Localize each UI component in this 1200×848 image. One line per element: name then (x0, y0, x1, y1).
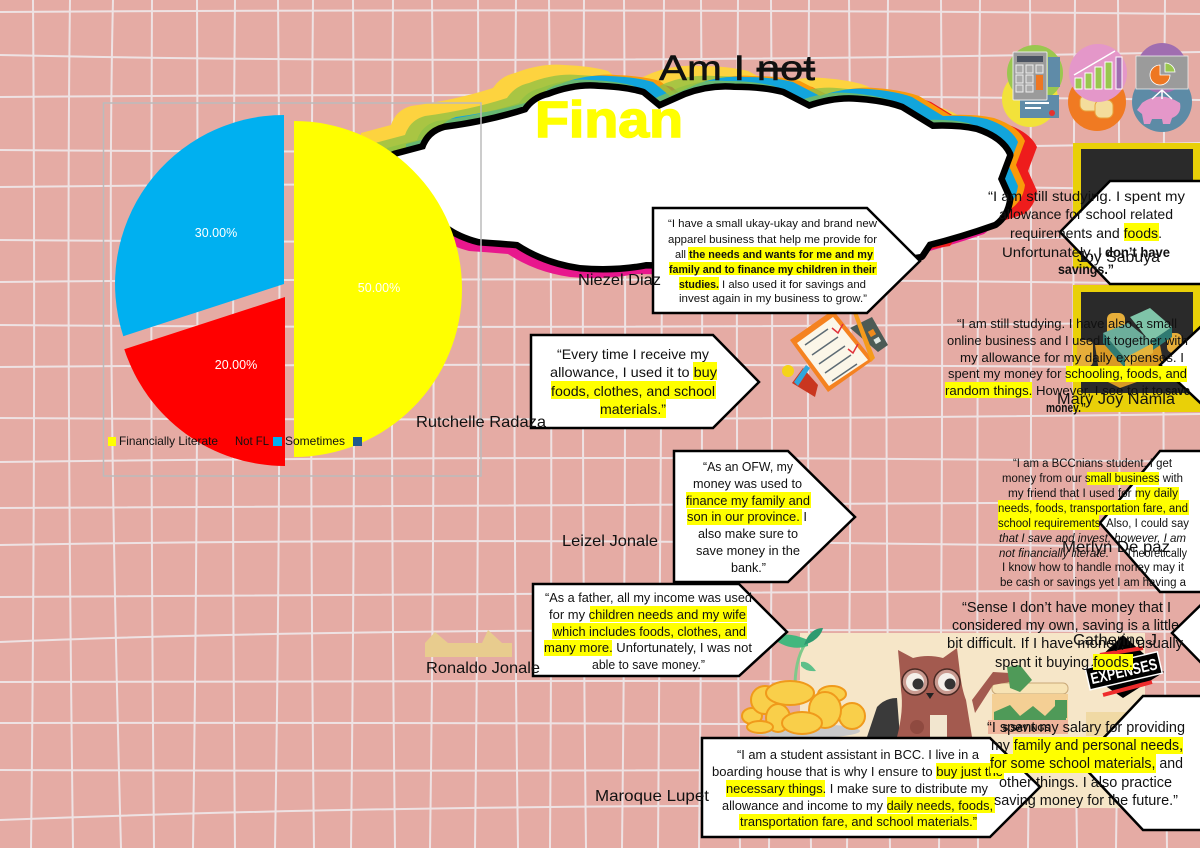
quote: Ronaldo Jonale: which includes foods, clothes, and (552, 625, 746, 639)
quote text: Mary Joy Namla: “I am still studying. I have also a small (957, 317, 1177, 331)
icon: money stack (1077, 308, 1182, 388)
quote text: Joy Sabuya: savings.” (1058, 261, 1114, 277)
quote: Maroque Lupet: necessary things. I make sure to distribute my (726, 782, 989, 796)
quote: Niezel Diaz: all (675, 249, 686, 261)
quote text: salary: for some school materials, and (990, 755, 1183, 772)
quote: Maroque Lupet: allowance and income to my daily needs, foods, (722, 799, 993, 813)
quote text: Mary Joy Namla: money.” (1046, 401, 1086, 415)
title: Am I not (659, 49, 815, 88)
quote: Rutchelle Radaza: “Every time I receive my (557, 346, 709, 362)
name: Leizel Jonale: Leizel Jonale (562, 533, 658, 550)
icon: EXPENSES stamp: EXPENSES (1089, 656, 1159, 688)
quote text: Merlyn De paz: Theoretically (1126, 548, 1187, 560)
quote text: Joy Sabuya: “I am still studying. I spent my (988, 188, 1185, 204)
quote text: Joy Sabuya (988, 188, 1185, 277)
quote: Ronaldo Jonale (533, 584, 787, 676)
name: Maroque Lupet: Maroque Lupet (595, 788, 710, 805)
legend: Financially Literate (119, 434, 218, 448)
quote: Leizel Jonale: bank.” (731, 560, 766, 575)
icon: savings jar (988, 683, 1068, 734)
chalkboard 2 (1073, 285, 1200, 412)
pie chart (104, 103, 481, 476)
quote text: salary (987, 719, 1185, 809)
callout box (533, 584, 787, 676)
icon: top right finance icons (1002, 43, 1192, 132)
quote: Niezel Diaz: the needs and wants for me and my (689, 249, 874, 261)
quote text: Joy Sabuya: requirements and foods. (1010, 225, 1162, 241)
callout: Joy Sabuya box (1060, 181, 1200, 284)
quote text: salary: other things. I also practice (999, 774, 1172, 791)
icon: squirrel (867, 648, 1032, 737)
quote text: Mary Joy Namla: online business and I used it together with (947, 334, 1188, 348)
quote text: Mary Joy Namla: my allowance for my daily expenses. I (960, 351, 1184, 365)
slice: 50% financially literate (294, 121, 462, 457)
quote text: Merlyn De paz: my friend that I used for my daily (1008, 488, 1178, 500)
callout box (674, 451, 855, 582)
legend: Sometimes (285, 434, 345, 448)
quote: Maroque Lupet (702, 738, 1040, 837)
quote: Niezel Diaz: invest again in my business to grow.” (679, 293, 867, 305)
icon: second jar (1086, 712, 1130, 736)
quote: Leizel Jonale: also make sure to (698, 526, 798, 541)
title: Finan: Finan (535, 91, 683, 148)
chart frame (104, 103, 481, 476)
quote: Ronaldo Jonale: “As a father, all my income was used (545, 591, 752, 605)
chalkboards (1073, 143, 1200, 412)
callout: Catherine box (1172, 596, 1200, 672)
quote text: Catherine J: spent it buying foods. (995, 655, 1133, 671)
quote: Niezel Diaz: apparel business that help me provide for (668, 234, 877, 246)
quote: Ronaldo Jonale: for my children needs and my wife (549, 608, 746, 622)
quote: Leizel Jonale: finance my family and (686, 493, 810, 508)
icon: monthly expenses planner (782, 310, 888, 397)
quote text: Merlyn De paz: be cash or savings yet I am having a (1000, 577, 1187, 589)
quote: Rutchelle Radaza (531, 335, 759, 428)
quote text: Catherine J: “Sense I don’t have money that I (962, 600, 1171, 616)
quote text: Catherine J: bit difficult. If I have money, I usually (947, 636, 1184, 652)
quote: Leizel Jonale: son in our province. I (687, 509, 807, 524)
quote: Leizel Jonale (674, 451, 855, 582)
quote text: Mary Joy Namla: spent my money for schooling, foods, and (948, 367, 1187, 381)
quote text: Mary Joy Namla: save (1165, 384, 1190, 398)
quote: Niezel Diaz (653, 208, 920, 313)
slice: 20% not FL (124, 297, 285, 466)
name: Merlyn De paz: Merlyn De paz (1062, 539, 1170, 556)
quote: Rutchelle Radaza: foods, clothes, and school (551, 383, 715, 399)
quote: Niezel Diaz: “I have a small ukay-ukay and brand new (668, 218, 877, 230)
quote text: salary: saving money for the future.” (994, 792, 1178, 809)
rainbow cloud banner (361, 65, 1037, 278)
callout box (653, 208, 920, 313)
quote text: Merlyn De paz: that I save and invest, however, I am (999, 533, 1186, 545)
quote: Rutchelle Radaza: allowance, I used it to buy (550, 364, 717, 380)
quote text: Catherine J: considered my own, saving is a little (952, 618, 1179, 634)
icon: coin pile and sprout (742, 628, 865, 738)
icon: faint building (425, 630, 512, 657)
name: Catherine J: Catherine J (1073, 632, 1157, 649)
quote text: Mary Joy Namla: random things. However, I see to it to (945, 384, 1163, 398)
quote text: Joy Sabuya: Unfortunately, I (1002, 244, 1102, 260)
quote: Leizel Jonale: “As an OFW, my (703, 459, 793, 474)
quote: Niezel Diaz: I also used it for savings and (722, 279, 866, 291)
callout box (702, 738, 1040, 837)
quote: Leizel Jonale: save money in the (696, 543, 800, 558)
quote: Maroque Lupet: boarding house that is why I ensure to buy just the (712, 765, 1003, 779)
icon: leaf money (1007, 665, 1032, 692)
data labels: 50.00% (358, 281, 400, 295)
callout: last right box (1080, 696, 1200, 830)
callout: Merlyn De paz box (1100, 451, 1200, 592)
jar label: $ SAVINGS (1003, 723, 1050, 733)
quote: Rutchelle Radaza: materials.” (600, 401, 666, 417)
slice: 30% sometimes (115, 115, 284, 336)
quote text: Merlyn De paz: not financially literate. (999, 548, 1109, 560)
quote: Niezel Diaz: studies. (679, 279, 719, 291)
name: Mary Joy Namla: Mary Joy Namla (1057, 391, 1175, 408)
quote text: Catherine J (947, 600, 1184, 671)
quote text: Joy Sabuya: don’t have (1105, 244, 1170, 260)
title (535, 49, 815, 148)
name: Joy Sabuya: Joy Sabuya (1077, 249, 1160, 266)
name: Ronaldo Jonale: Ronaldo Jonale (426, 660, 540, 677)
data labels (195, 226, 400, 372)
quote: Ronaldo Jonale: able to save money.” (592, 658, 705, 672)
callout box (531, 335, 759, 428)
quote text: salary: “I spent my salary for providing (987, 719, 1185, 736)
quote: Niezel Diaz: family and to finance my children in their (669, 264, 877, 276)
quote text: Merlyn De paz: school requirements. Also, I could say (998, 518, 1189, 530)
quote text: Merlyn De paz: “I am a BCCnians student, I get (1013, 458, 1173, 470)
quote text: Merlyn De paz: I know how to handle money may it (1002, 562, 1185, 574)
name: Rutchelle Radaza: Rutchelle Radaza (416, 414, 546, 431)
quote: Maroque Lupet: transportation fare, and school materials.” (740, 815, 977, 829)
data labels: 20.00% (215, 358, 257, 372)
callout: Mary Joy Namla box (1160, 318, 1200, 412)
quote text: salary: my family and personal needs, (991, 737, 1183, 754)
quote text: Merlyn De paz (998, 458, 1189, 589)
chalkboard 1 (1073, 143, 1200, 268)
quote text: Merlyn De paz: needs, foods, transportation fare, and (998, 503, 1188, 515)
quote: Maroque Lupet: “I am a student assistant in BCC. I live in a (737, 748, 979, 762)
name: Niezel Diaz: Niezel Diaz (578, 272, 661, 289)
quote text: Mary Joy Namla (945, 317, 1190, 415)
legend (108, 434, 362, 448)
quote text: Merlyn De paz: money from our small business with (1002, 473, 1183, 485)
legend: Not FL (235, 434, 269, 448)
illustration background (800, 633, 1145, 808)
quote: Ronaldo Jonale: many more. Unfortunately, I was not (544, 641, 753, 655)
quote text: Joy Sabuya: allowance for school related (999, 206, 1173, 222)
illustration: squirrel with savings (742, 628, 1145, 808)
icon: EXPENSES stamp (1085, 635, 1164, 698)
quote: Leizel Jonale: money was used to (693, 476, 802, 491)
names (416, 249, 1175, 805)
data labels: 30.00% (195, 226, 237, 240)
